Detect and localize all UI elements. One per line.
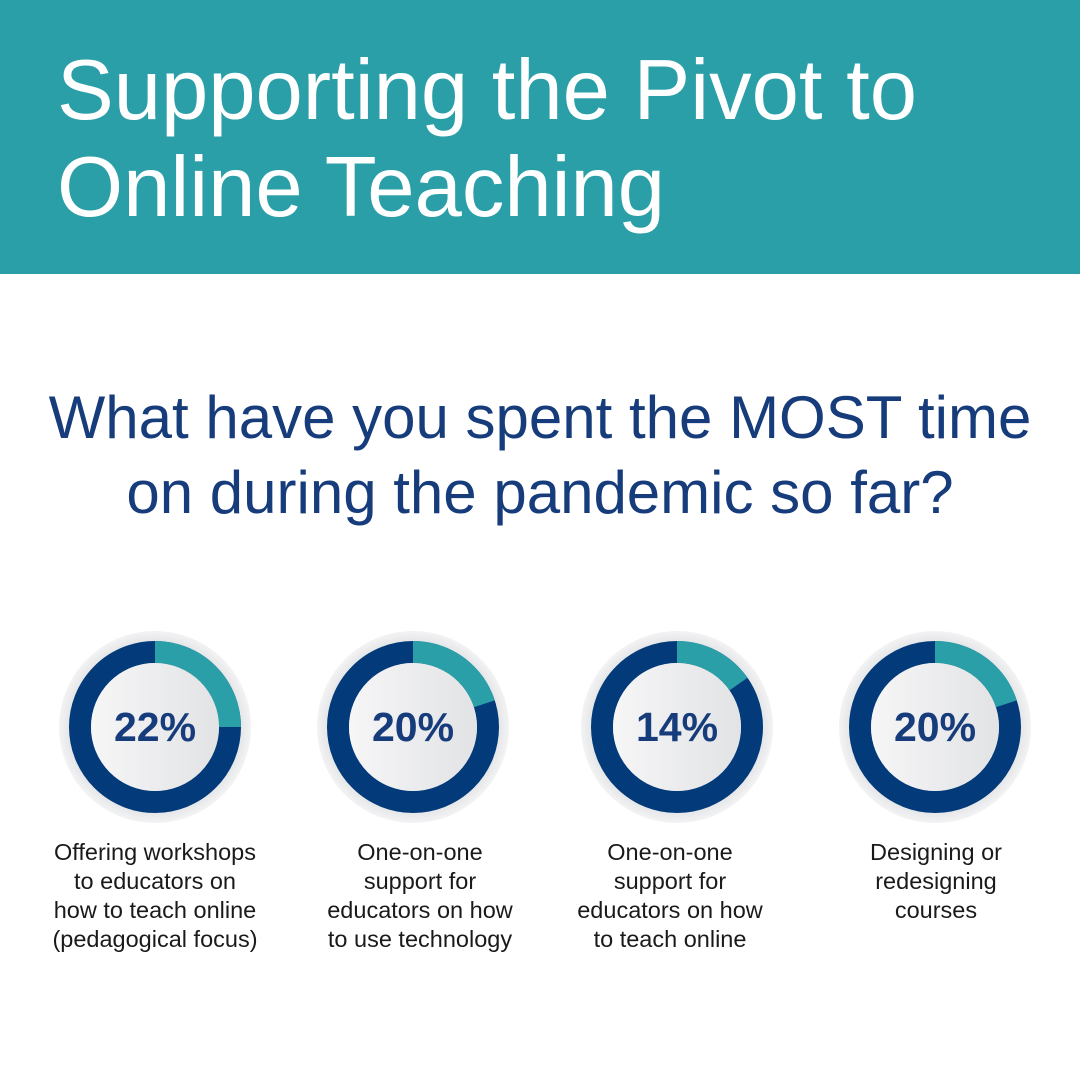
label 4: courses	[895, 897, 977, 923]
label 3: support for	[614, 868, 726, 894]
header band	[0, 0, 1080, 274]
label 4: redesigning	[875, 868, 997, 894]
label 1: (pedagogical focus)	[52, 926, 258, 952]
question heading: What have you spent the MOST time	[49, 384, 1031, 451]
label 4	[870, 839, 1002, 923]
label 3	[577, 839, 763, 952]
donut: 20%: 20%	[894, 704, 976, 750]
label 3: One-on-one	[607, 839, 733, 865]
title: Online Teaching	[57, 140, 665, 235]
question heading	[48, 384, 1031, 526]
label 2	[327, 839, 513, 952]
label 2: educators on how	[327, 897, 513, 923]
label 2: One-on-one	[357, 839, 483, 865]
donut: 22%	[59, 631, 251, 823]
label 3: educators on how	[577, 897, 763, 923]
donut: 20%: 20%	[372, 704, 454, 750]
donut: 22%: 22%	[114, 704, 196, 750]
label 2: support for	[364, 868, 476, 894]
label 1	[52, 839, 258, 952]
label 3: to teach online	[594, 926, 746, 952]
label 4: Designing or	[870, 839, 1002, 865]
title	[57, 43, 917, 235]
label 1: how to teach online	[54, 897, 256, 923]
question heading: on during the pandemic so far?	[126, 459, 954, 526]
donut: 20%	[317, 631, 509, 823]
donut: 14%	[581, 631, 773, 823]
title: Supporting the Pivot to	[57, 43, 917, 138]
donut: 20%	[839, 631, 1031, 823]
label 1: Offering workshops	[54, 839, 256, 865]
label 2: to use technology	[328, 926, 512, 952]
label 1: to educators on	[74, 868, 236, 894]
donut: 14%: 14%	[636, 704, 718, 750]
